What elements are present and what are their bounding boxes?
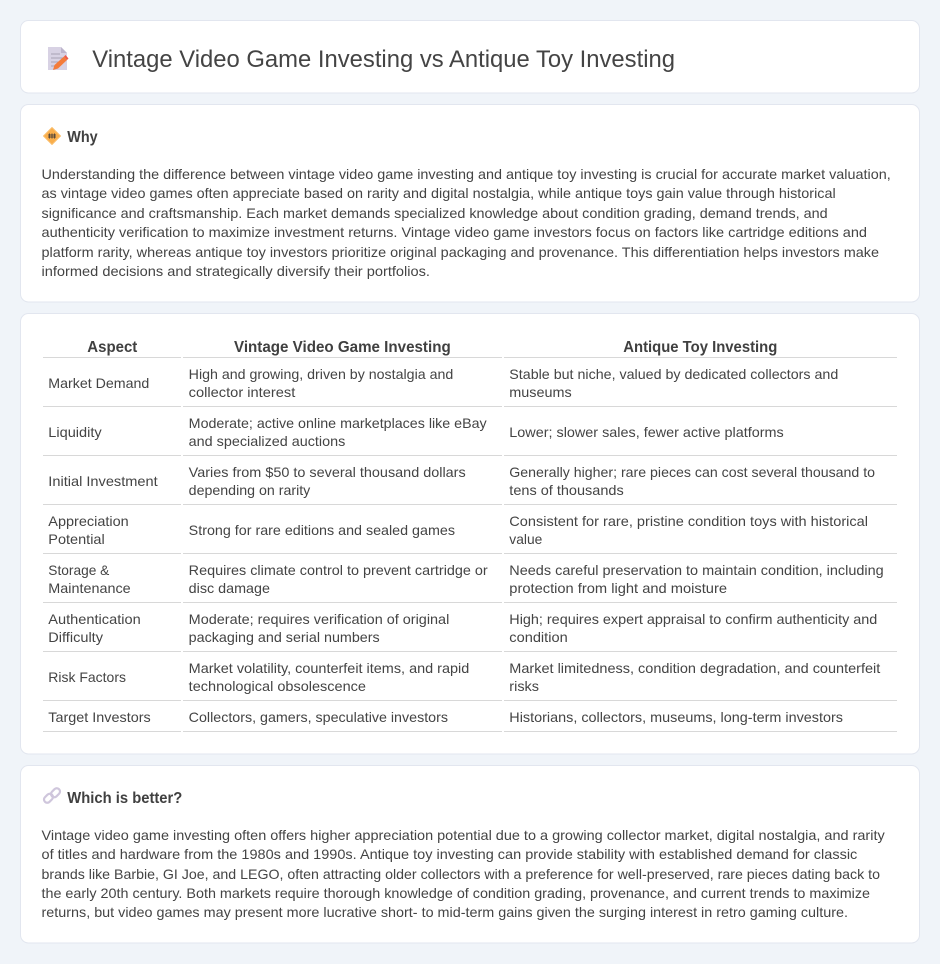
table row: appreciation potential: Appreciation (48, 513, 129, 529)
panel: why (20, 104, 920, 302)
table row: storage and maintenance: Storage & (48, 562, 110, 578)
heading: which is better: Which is better? (67, 790, 182, 807)
table row: initial investment: Generally higher; rare pieces can cost several thousand to (509, 464, 875, 480)
icon: chain link (43, 787, 61, 804)
text block: which is better paragraph: of titles and hardware from the 1980s and 1990s. Antique toy investing can provide stability with established demand for classic (42, 846, 857, 862)
table row: target investors (48, 709, 843, 725)
text block: why paragraph: informed decisions and strategically diversify their portfolios. (42, 263, 430, 279)
table row: storage and maintenance: Needs careful preservation to maintain condition, including (509, 562, 884, 578)
panel: title header (20, 20, 920, 93)
panel: comparison table (20, 314, 920, 754)
table row: authentication difficulty: packaging and serial numbers (189, 629, 380, 645)
table row: risk factors: Market volatility, counterfeit items, and rapid (189, 660, 469, 676)
text block: which is better paragraph: brands like Barbie, GI Joe, and LEGO, often attracting older collectors with a preference for well-preserved, rare pieces dating back to (42, 866, 880, 882)
text block: why paragraph: authenticity verification to maximize investment returns. Vintage video game investors focus on factors like cartridge editions and (42, 224, 867, 240)
table row: market demand: Stable but niche, valued by dedicated collectors and (509, 366, 838, 382)
table row: liquidity: and specialized auctions (189, 433, 345, 449)
table header row: Antique Toy Investing (623, 339, 777, 356)
table row: appreciation potential: value (509, 531, 543, 547)
table row: authentication difficulty: Moderate; requires verification of original (189, 611, 449, 627)
table header row (87, 339, 777, 356)
table row: storage and maintenance: protection from light and moisture (509, 580, 727, 596)
table row: storage and maintenance: disc damage (189, 580, 270, 596)
table row: authentication difficulty: condition (509, 629, 568, 645)
text block: which is better paragraph (42, 827, 885, 920)
table row: market demand: collector interest (189, 384, 295, 400)
table row: target investors: Target Investors (48, 709, 151, 725)
text block: why paragraph: platform rarity, whereas antique toy investors prioritize original packaging and provenance. This differentiation helps investors make (42, 244, 879, 260)
table row: authentication difficulty (48, 611, 877, 645)
table row: storage and maintenance (48, 562, 884, 596)
table row: market demand: museums (509, 384, 572, 400)
table row: storage and maintenance: Maintenance (48, 580, 131, 596)
table row: initial investment: depending on rarity (189, 482, 310, 498)
table header row: Aspect (87, 339, 138, 356)
table row: market demand (48, 366, 838, 400)
text block: which is better paragraph: returns, but video games may present more lucrative short- to mid-term gains given the surging interest in retro gaming culture. (42, 904, 848, 920)
table row: appreciation potential: Strong for rare editions and sealed games (189, 522, 455, 538)
table row: risk factors: technological obsolescence (189, 678, 366, 694)
table row: appreciation potential: Consistent for rare, pristine condition toys with historical (509, 513, 868, 529)
text block: which is better paragraph: the early 20th century. Both markets require thorough knowledge of condition grading, provenance, and current trends to maximize (42, 885, 870, 901)
table row: liquidity: Liquidity (48, 424, 102, 440)
text block: why paragraph: Understanding the difference between vintage video game investing and antique toy investing is crucial for accurate market valuation, (42, 166, 891, 182)
table row: initial investment: tens of thousands (509, 482, 624, 498)
heading: why: Why (67, 129, 98, 146)
table row: authentication difficulty: Difficulty (48, 629, 103, 645)
table row: risk factors: Market limitedness, condition degradation, and counterfeit (509, 660, 880, 676)
table row: storage and maintenance: Requires climate control to prevent cartridge or (189, 562, 488, 578)
table row: market demand: Market Demand (48, 375, 149, 391)
text block: why paragraph: significance and craftsmanship. Each market demands specialized knowledge about condition grading, demand trends, and (42, 205, 828, 221)
table row: risk factors: Risk Factors (48, 669, 126, 685)
text block: why paragraph (42, 166, 891, 279)
table row: risk factors (48, 660, 880, 694)
icon: warning diamond (44, 128, 60, 144)
table row: initial investment (48, 464, 875, 498)
panel: which is better (20, 766, 920, 943)
title: Vintage Video Game Investing vs Antique Toy Investing (92, 46, 675, 73)
table row: appreciation potential: Potential (48, 531, 105, 547)
text block: why paragraph: as vintage video games often appreciate based on rarity and digital nostalgia, while antique toys gain value through historical (42, 185, 836, 201)
table row: initial investment: Varies from $50 to several thousand dollars (189, 464, 466, 480)
table header row: Vintage Video Game Investing (234, 339, 451, 356)
table row: target investors: Historians, collectors, museums, long-term investors (509, 709, 843, 725)
text block: which is better paragraph: Vintage video game investing often offers higher appreciation potential due to a growing collector market, digital nostalgia, and rarity (42, 827, 885, 843)
table row: liquidity: Lower; slower sales, fewer active platforms (509, 424, 784, 440)
table row: target investors: Collectors, gamers, speculative investors (189, 709, 448, 725)
table row: liquidity (48, 415, 784, 449)
table row: authentication difficulty: High; requires expert appraisal to confirm authenticity and (509, 611, 877, 627)
table row: authentication difficulty: Authentication (48, 611, 141, 627)
table row: appreciation potential (48, 513, 868, 547)
table row: liquidity: Moderate; active online marketplaces like eBay (189, 415, 487, 431)
icon: document with pencil (48, 47, 68, 70)
table row: initial investment: Initial Investment (48, 473, 158, 489)
table row: market demand: High and growing, driven by nostalgia and (189, 366, 453, 382)
table row: risk factors: risks (509, 678, 539, 694)
